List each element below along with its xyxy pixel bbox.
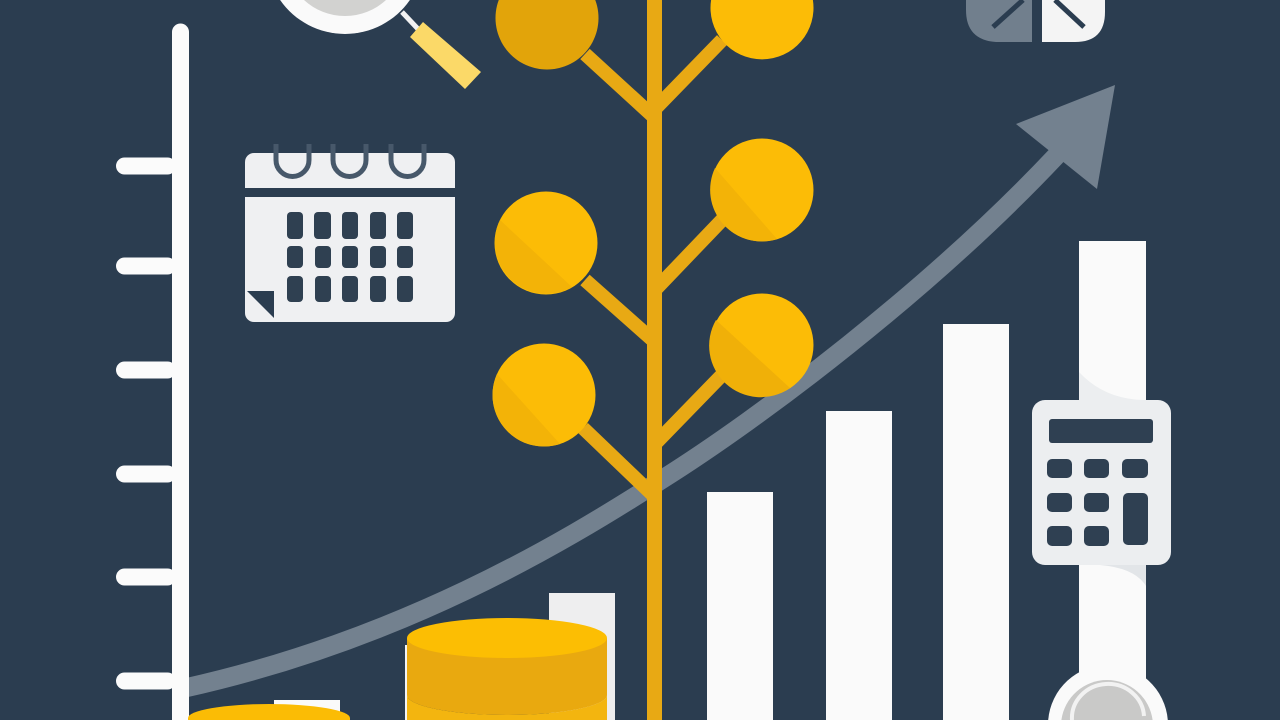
icon: pie chart: [966, 0, 1105, 42]
tree trunk: [647, 0, 662, 720]
bar chart: [274, 241, 1146, 720]
icon: magnifying glass: [280, 0, 481, 89]
icon: calendar: [245, 144, 455, 322]
icon: gauge dial: [1048, 665, 1168, 720]
large coin stack: [405, 618, 607, 720]
coin leaves: [492, 0, 814, 447]
growth arrow: [185, 85, 1115, 688]
tree branches: [583, 40, 722, 498]
small coin stack: [188, 704, 350, 720]
ruler axis with ticks: [116, 24, 189, 720]
money tree: [492, 0, 814, 720]
icon: calculator: [1032, 400, 1171, 565]
